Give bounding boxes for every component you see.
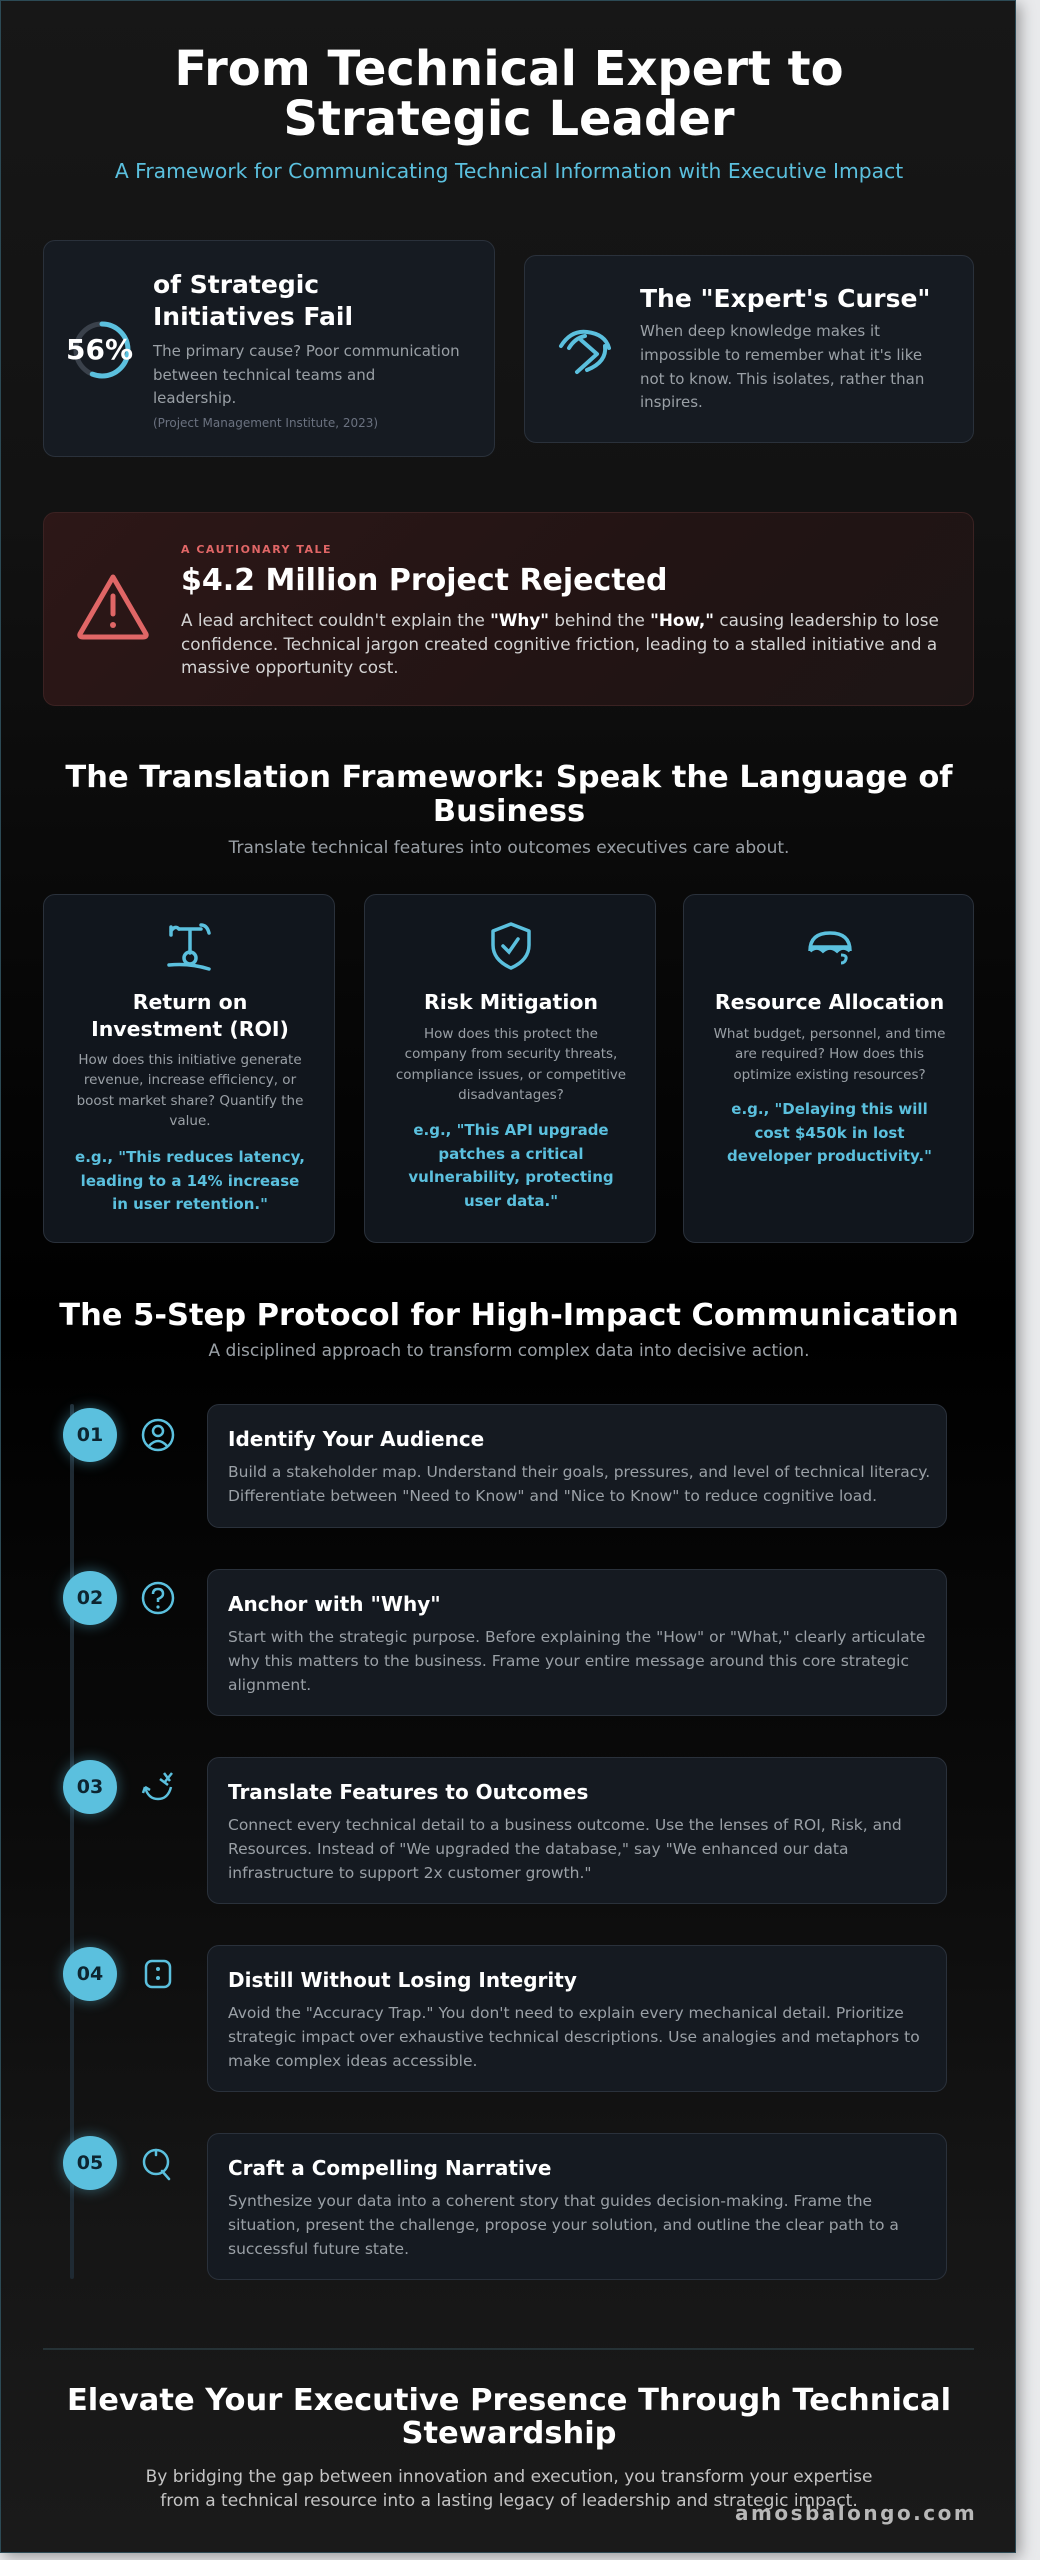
description: company from security threats, xyxy=(405,1046,617,1062)
number badge: 04 xyxy=(77,1963,103,1985)
number badge xyxy=(63,1760,117,1814)
step card: Start with the strategic purpose. Before explaining the "How" or "What," clearly articulate xyxy=(228,1628,925,1646)
step card: Identify Your Audience xyxy=(228,1427,484,1451)
footer heading: Elevate Your Executive Presence Through Technical xyxy=(67,2383,951,2418)
step card xyxy=(207,2133,947,2280)
panel: 56% stat xyxy=(43,240,495,457)
description: revenue, increase efficiency, or xyxy=(84,1072,296,1088)
body text: leadership. xyxy=(153,389,236,407)
body text: confidence. Technical jargon created cognitive friction, leading to a stalled initiative and a xyxy=(181,634,937,654)
title xyxy=(174,41,844,147)
number badge: 05 xyxy=(77,2152,103,2174)
footer text: from a technical resource into a lasting legacy of leadership and strategic impact. xyxy=(160,2491,858,2511)
step card: why this matters to the business. Frame your entire message around this core strategic xyxy=(228,1652,909,1670)
card title: Investment (ROI) xyxy=(91,1017,289,1041)
example: leading to a 14% increase xyxy=(81,1172,299,1190)
body text xyxy=(181,610,939,677)
description: How does this protect the xyxy=(424,1026,598,1042)
card title xyxy=(91,990,289,1041)
panel: resource allocation xyxy=(683,894,974,1243)
description: What budget, personnel, and time xyxy=(714,1026,945,1042)
number badge: 03 xyxy=(77,1776,103,1798)
footer heading: Stewardship xyxy=(401,2416,617,2451)
step card: Resources. Instead of "We upgraded the database," say "We enhanced our data xyxy=(228,1840,848,1858)
icon: shield xyxy=(491,922,531,970)
footer heading xyxy=(67,2383,951,2451)
description: optimize existing resources? xyxy=(733,1067,926,1083)
footer text: By bridging the gap between innovation and execution, you transform your expertise xyxy=(146,2467,872,2487)
step card: Build a stakeholder map. Understand their goals, pressures, and level of technical literacy. xyxy=(228,1463,930,1481)
panel: ROI xyxy=(43,894,335,1243)
footer text xyxy=(146,2467,872,2511)
step card: situation, present the challenge, propose your solution, and outline the clear path to a xyxy=(228,2216,899,2234)
number badge xyxy=(63,1571,117,1625)
step card: alignment. xyxy=(228,1676,311,1694)
body text xyxy=(152,342,460,407)
example: in user retention." xyxy=(112,1195,268,1213)
example: e.g., "This reduces latency, xyxy=(75,1148,305,1166)
step card: Connect every technical detail to a business outcome. Use the lenses of ROI, Risk, and xyxy=(228,1816,902,1834)
step card: Craft a Compelling Narrative xyxy=(228,2156,551,2180)
step card: Differentiate between "Need to Know" and "Nice to Know" to reduce cognitive load. xyxy=(228,1487,877,1505)
donut chart xyxy=(74,322,130,378)
step card xyxy=(207,1569,947,1716)
heading: of Strategic xyxy=(153,270,319,299)
example xyxy=(75,1148,305,1213)
icon: translate xyxy=(142,1772,173,1800)
body text: between technical teams and xyxy=(153,366,375,384)
card title: Return on xyxy=(133,990,247,1014)
icon: person xyxy=(142,1418,174,1452)
number badge: 02 xyxy=(77,1587,103,1609)
icon: ROI xyxy=(167,923,211,971)
step card: Distill Without Losing Integrity xyxy=(228,1968,577,1992)
description xyxy=(77,1052,303,1129)
number badge xyxy=(63,1947,117,2001)
description: boost market share? Quantify the xyxy=(77,1093,303,1109)
number badge: 01 xyxy=(77,1424,103,1446)
example: e.g., "This API upgrade xyxy=(413,1121,609,1139)
example: cost $450k in lost xyxy=(754,1124,905,1142)
step 03 xyxy=(55,1752,947,1904)
step 04 xyxy=(55,1939,947,2092)
example xyxy=(408,1121,614,1210)
step card: Avoid the "Accuracy Trap." You don't need to explain every mechanical detail. Prioritize xyxy=(228,2004,904,2022)
example: user data." xyxy=(464,1192,558,1210)
example: patches a critical xyxy=(438,1145,584,1163)
heading: translation framework: Business xyxy=(433,794,585,829)
body text xyxy=(640,322,924,411)
body text: A lead architect couldn't explain the "Why" behind the "How," causing leadership to lose xyxy=(181,610,939,630)
icon: distill xyxy=(144,1960,172,1988)
description: value. xyxy=(169,1113,211,1129)
description: disadvantages? xyxy=(458,1087,564,1103)
step 01 xyxy=(55,1400,947,1528)
step card xyxy=(207,1757,947,1904)
subheading: Translate technical features into outcomes executives care about. xyxy=(229,838,789,858)
icon: curse xyxy=(558,330,611,374)
step card: infrastructure to support 2x customer growth." xyxy=(228,1864,592,1882)
description: compliance issues, or competitive xyxy=(396,1067,626,1083)
body text: massive opportunity cost. xyxy=(181,657,399,677)
step card xyxy=(207,1945,947,2092)
heading: translation framework xyxy=(65,760,953,829)
step card: successful future state. xyxy=(228,2240,409,2258)
body text: inspires. xyxy=(640,393,703,411)
step card: Synthesize your data into a coherent story that guides decision-making. Frame the xyxy=(228,2192,872,2210)
example: vulnerability, protecting xyxy=(408,1168,614,1186)
step card: Translate Features to Outcomes xyxy=(228,1780,588,1804)
label: A CAUTIONARY TALE xyxy=(181,543,332,556)
example: e.g., "Delaying this will xyxy=(731,1100,928,1118)
card title: Resource Allocation xyxy=(715,990,944,1014)
panel: risk mitigation xyxy=(364,894,656,1243)
icon: warning xyxy=(77,574,149,640)
subtitle: A Framework for Communicating Technical Information with Executive Impact xyxy=(115,159,903,183)
example xyxy=(727,1100,932,1165)
heading: Initiatives Fail xyxy=(153,302,353,331)
heading: $4.2 Million Project Rejected xyxy=(181,563,667,598)
example: developer productivity." xyxy=(727,1147,932,1165)
title: Strategic Leader xyxy=(283,91,735,147)
step card: Anchor with "Why" xyxy=(228,1592,441,1616)
step 05 xyxy=(55,2128,947,2280)
number badge xyxy=(63,1408,117,1462)
heading: translation framework: The Translation Framework: Speak the Language of xyxy=(65,760,953,795)
panel: expert's curse xyxy=(524,255,974,443)
heading: 5-step protocol: The 5-Step Protocol for High-Impact Communication xyxy=(59,1298,959,1333)
title: From Technical Expert to xyxy=(174,41,844,97)
subheading: A disciplined approach to transform complex data into decisive action. xyxy=(208,1341,809,1361)
panel: cautionary tale xyxy=(43,512,974,706)
citation: (Project Management Institute, 2023) xyxy=(153,416,378,430)
body text: not to know. This isolates, rather than xyxy=(640,370,924,388)
icon: resource xyxy=(808,931,852,964)
description xyxy=(396,1026,626,1103)
body text: When deep knowledge makes it xyxy=(640,322,880,340)
number badge xyxy=(63,2136,117,2190)
body text: impossible to remember what it's like xyxy=(640,346,922,364)
heading: The "Expert's Curse" xyxy=(640,284,930,313)
step 02 xyxy=(55,1563,947,1716)
description: are required? How does this xyxy=(735,1046,924,1062)
step card: make complex ideas accessible. xyxy=(228,2052,477,2070)
body text: The primary cause? Poor communication xyxy=(153,342,460,360)
icon: narrative xyxy=(142,2148,170,2180)
stat number: 56% xyxy=(66,333,133,366)
step card: strategic impact over exhaustive technical descriptions. Use analogies and metaphors to xyxy=(228,2028,920,2046)
icon: question xyxy=(142,1582,174,1614)
watermark: amosbalongo.com xyxy=(735,2501,977,2525)
description xyxy=(714,1026,945,1083)
heading xyxy=(153,270,353,331)
step card xyxy=(207,1404,947,1528)
card title: Risk Mitigation xyxy=(424,990,598,1014)
description: How does this initiative generate xyxy=(78,1052,302,1068)
